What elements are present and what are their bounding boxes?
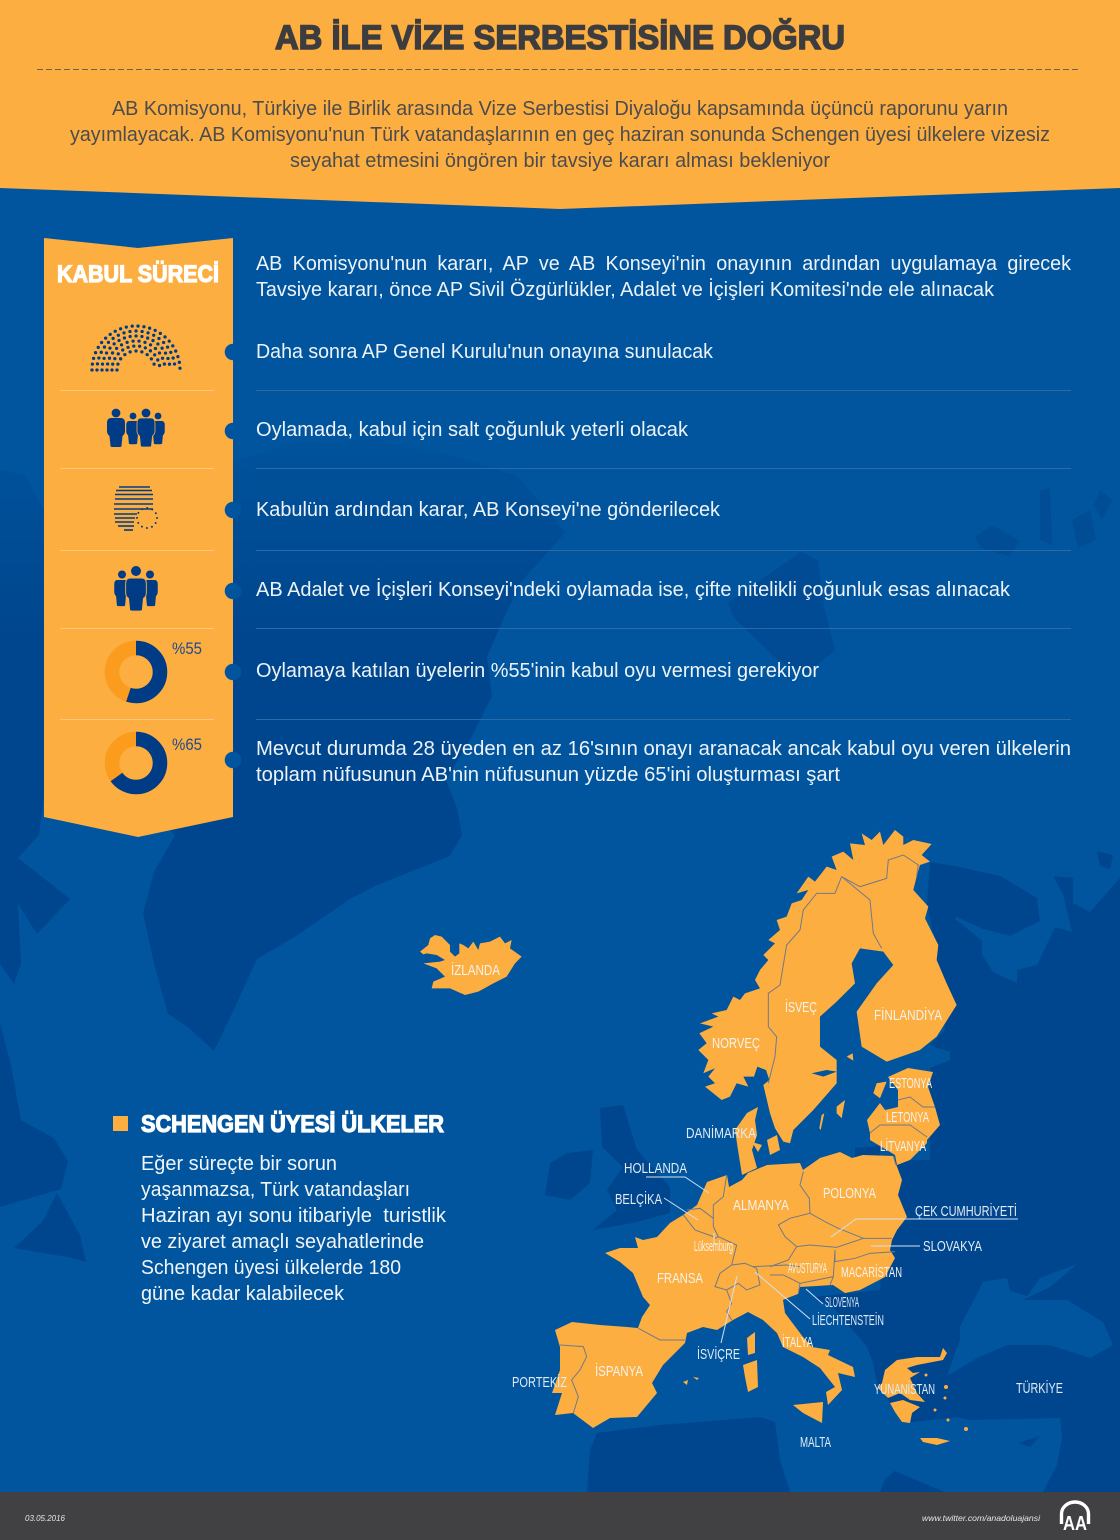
section heading: SCHENGEN ÜYESİ ÜLKELER bbox=[141, 1111, 444, 1138]
map: continental Europe bbox=[552, 1152, 907, 1428]
label: Danimarka: DANİMARKA bbox=[686, 1124, 756, 1142]
label: Almanya: ALMANYA bbox=[733, 1197, 789, 1214]
label: Çek Cumhuriyeti: ÇEK CUMHURİYETİ bbox=[915, 1202, 1017, 1220]
chart: donut 55 percent bbox=[112, 639, 202, 696]
footer date: 03.05.2016 bbox=[25, 1513, 65, 1523]
label: Hollanda: HOLLANDA bbox=[624, 1160, 687, 1177]
map: Schengen countries: AVUSTURYA bbox=[788, 1260, 827, 1277]
title: AB İLE VİZE SERBESTİSİNE DOĞRU bbox=[275, 19, 845, 57]
step: commission decision: Tavsiye kararı, önce AP Sivil Özgürlükler, Adalet ve İçişleri Komitesi'nde ele alınacak bbox=[256, 278, 995, 301]
label: Fransa: FRANSA bbox=[657, 1270, 703, 1287]
icon: EU council stripes and star circle bbox=[114, 487, 157, 530]
label: Litvanya: LİTVANYA bbox=[880, 1137, 926, 1155]
label: İsviçre: İSVİÇRE bbox=[697, 1345, 740, 1363]
panel: Schengen member countries bbox=[113, 1111, 447, 1305]
icon: legend square bbox=[113, 1116, 128, 1131]
label: İspanya: İSPANYA bbox=[595, 1362, 643, 1380]
label: Norveç: NORVEÇ bbox=[712, 1035, 760, 1052]
label: Liechtenstein: LİECHTENSTEİN bbox=[812, 1311, 884, 1329]
icon: parliament hemicycle bbox=[92, 326, 180, 370]
panel: Kabul Süreci bbox=[44, 238, 233, 837]
label: Malta: MALTA bbox=[800, 1434, 831, 1451]
label: Türkiye: TÜRKİYE bbox=[1016, 1379, 1063, 1397]
map: country borders bbox=[560, 1156, 896, 1413]
section body text: Eğer süreçte bir sorun bbox=[141, 1153, 337, 1175]
step: majority vote: Oylamada, kabul için salt çoğunluk yeterli olacak bbox=[256, 418, 689, 441]
map: Schengen countries bbox=[420, 830, 1063, 1451]
label: Yunanistan: YUNANİSTAN bbox=[874, 1380, 935, 1398]
step: 55 percent: Oylamaya katılan üyelerin %55'inin kabul oyu vermesi gerekiyor bbox=[256, 659, 819, 682]
label: İzlanda: İZLANDA bbox=[451, 961, 500, 979]
map: Baltic states bbox=[867, 1068, 940, 1165]
section body text: yaşanmazsa, Türk vatandaşları bbox=[141, 1179, 410, 1201]
map: Iceland bbox=[420, 935, 522, 995]
chart: donut 55 percent: %55 bbox=[172, 639, 202, 658]
map: Mediterranean islands bbox=[683, 1332, 968, 1445]
step: qualified majority: AB Adalet ve İçişleri Konseyi'ndeki oylamada ise, çifte nitelikli çoğunluk esas alınacak bbox=[256, 578, 1011, 601]
label: Macaristan: MACARİSTAN bbox=[841, 1263, 902, 1281]
header intro text bbox=[70, 98, 1050, 172]
label: İtalya: İTALYA bbox=[782, 1333, 813, 1351]
footer bar bbox=[0, 1492, 1120, 1540]
label: Slovakya: SLOVAKYA bbox=[923, 1238, 982, 1255]
label: Finlandiya: FİNLANDİYA bbox=[874, 1006, 942, 1024]
label: Portekiz: PORTEKİZ bbox=[512, 1373, 567, 1391]
section body text: ve ziyaret amaçlı seyahatlerinde bbox=[141, 1231, 424, 1253]
step: general assembly: Daha sonra AP Genel Kurulu'nun onayına sunulacak bbox=[256, 340, 714, 363]
background: dark world map landmasses bbox=[0, 440, 1120, 1492]
section body text: Schengen üyesi ülkelerde 180 bbox=[141, 1257, 401, 1279]
timeline bullets bbox=[225, 344, 241, 768]
header intro text: seyahat etmesini öngören bir tavsiye kararı alması bekleniyor bbox=[290, 150, 830, 172]
panel heading: KABUL SÜRECİ bbox=[57, 261, 219, 288]
map: Schengen countries: Lüksemburg bbox=[694, 1238, 733, 1255]
label: Belçika: BELÇİKA bbox=[615, 1190, 662, 1208]
label: Letonya: LETONYA bbox=[886, 1109, 929, 1126]
step: 65 percent: Mevcut durumda 28 üyeden en az 16'sının onayı aranacak ancak kabul oyu veren ülkelerin bbox=[256, 737, 1071, 760]
text block: process steps bbox=[256, 252, 1072, 786]
map: leader lines bbox=[646, 1177, 1018, 1343]
step: 65 percent bbox=[256, 737, 1071, 786]
step: 65 percent: toplam nüfusunun AB'nin nüfusunun yüzde 65'ini oluşturması şart bbox=[256, 763, 840, 786]
map: Scandinavia bbox=[698, 830, 957, 1143]
icon: three people bbox=[114, 566, 158, 611]
step: commission decision: AB Komisyonu'nun kararı, AP ve AB Konseyi'nin onayının ardından uygulamaya girecek bbox=[256, 252, 1072, 275]
label: Estonya: ESTONYA bbox=[889, 1075, 932, 1092]
header intro text: yayımlayacak. AB Komisyonu'nun Türk vatandaşlarının en geç haziran sonunda Schengen üyesi ülkelere vizesiz bbox=[70, 124, 1050, 146]
chart: donut 65 percent bbox=[112, 735, 202, 787]
map: Schengen countries: SLOVENYA bbox=[825, 1294, 859, 1311]
chart: donut 65 percent: %65 bbox=[172, 735, 202, 754]
icon: AA logo bbox=[1062, 1502, 1088, 1535]
header banner bbox=[0, 0, 1120, 209]
label: İsveç: İSVEÇ bbox=[785, 998, 817, 1016]
footer twitter url: www.twitter.com/anadoluajansi bbox=[922, 1513, 1041, 1523]
label: Polonya: POLONYA bbox=[823, 1185, 876, 1202]
step: commission decision bbox=[256, 252, 1072, 301]
section body text bbox=[141, 1153, 447, 1305]
icon: group of four people bbox=[107, 409, 165, 447]
icon: AA logo: AA bbox=[1063, 1513, 1087, 1535]
background: Black Sea bbox=[947, 1264, 1113, 1376]
map: Denmark bbox=[735, 1107, 780, 1175]
section body text: güne kadar kalabilecek bbox=[141, 1283, 345, 1305]
header intro text: AB Komisyonu, Türkiye ile Birlik arasında Vize Serbestisi Diyaloğu kapsamında üçüncü raporunu yarın bbox=[112, 98, 1008, 120]
step: sent to council: Kabulün ardından karar, AB Konseyi'ne gönderilecek bbox=[256, 498, 721, 521]
section body text: Haziran ayı sonu itibariyle turistlik bbox=[141, 1205, 447, 1227]
